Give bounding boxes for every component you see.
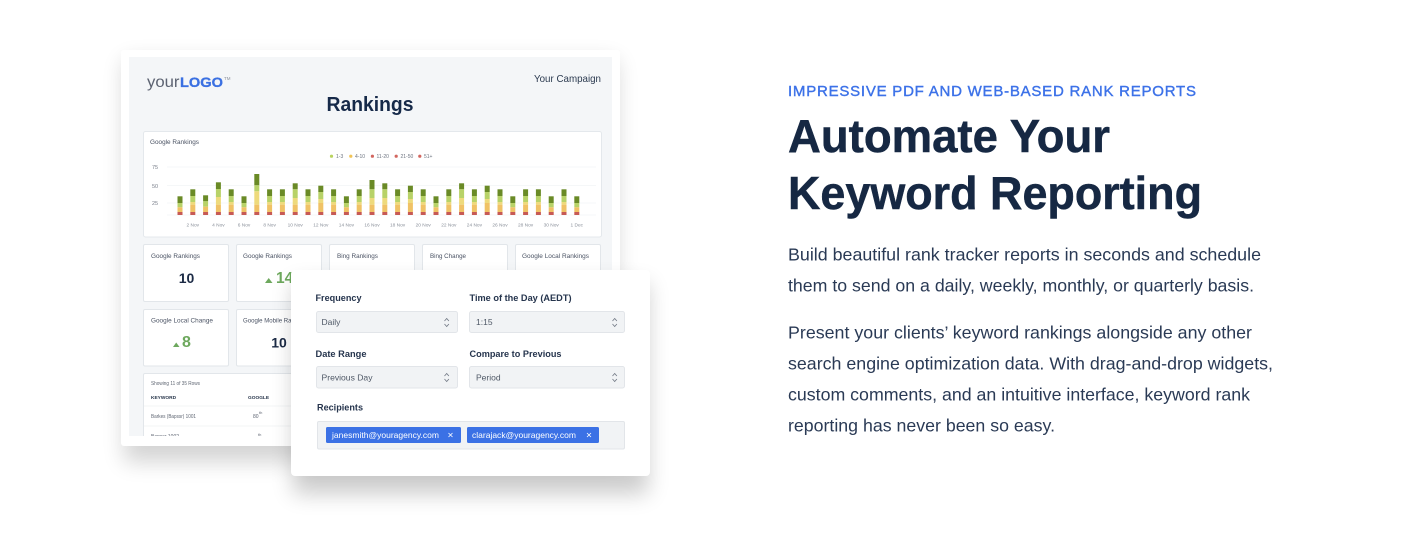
chart x axis: 2 Nov (187, 222, 200, 228)
chart x axis: 4 Nov (212, 222, 225, 228)
chart x axis: 30 Nov (544, 222, 559, 228)
heading: Keyword Reporting (788, 167, 1202, 219)
metric card: bing rankings (330, 244, 414, 302)
metric card: google local rankings: Google Local Rankings (522, 254, 589, 260)
chart x axis: 28 Nov (518, 222, 534, 228)
bar chart: google rankings (144, 132, 602, 237)
metric card: google local change: Google Local Change (151, 318, 214, 324)
metric card: google rankings: 10 (179, 270, 194, 286)
chart x axis: 24 Nov (467, 222, 483, 228)
heading (788, 110, 1202, 219)
metric card: google rankings change: 14 (276, 270, 294, 287)
field: date range (316, 349, 458, 388)
chart y axis (152, 165, 158, 207)
logo (147, 74, 231, 91)
field: time of the day (470, 293, 624, 332)
field: time of the day: 1:15 (476, 317, 493, 327)
chart x axis: 12 Nov (313, 222, 329, 228)
heading: Automate Your (788, 110, 1110, 162)
metric card: google rankings change: Google Rankings (243, 254, 292, 260)
field: frequency: Daily (322, 317, 341, 327)
metric card: bing change (422, 244, 508, 302)
recipient chip: janesmith (326, 427, 461, 443)
campaign label: Your Campaign (534, 73, 601, 85)
chart x axis: 14 Nov (339, 222, 355, 228)
field: recipients: Recipients (317, 402, 363, 412)
chart x axis: 22 Nov (441, 222, 457, 228)
rankings table: Barkes (Bapssr) 1001 (151, 414, 196, 420)
rankings table (143, 373, 291, 436)
paragraph: features: custom comments, and an intuitive interface, keyword rank (788, 385, 1250, 405)
chart x axis: 26 Nov (492, 222, 508, 228)
rankings table: th (258, 432, 261, 437)
chart title: Google Rankings (150, 139, 199, 146)
chart bars (178, 174, 579, 215)
chart x axis: 18 Nov (390, 222, 406, 228)
metric card: google rankings: Google Rankings (151, 254, 200, 260)
metric card: google mobile rankings: Google Mobile Rankings (243, 318, 309, 324)
metric card: google mobile rankings: 10 (271, 334, 287, 350)
rankings table: Showing 11 of 35 Rows (151, 381, 200, 387)
metric card: bing rankings: Bing Rankings (337, 254, 378, 260)
chart x axis (187, 222, 584, 228)
paragraph: features: search engine optimization data. With drag-and-drop widgets, (788, 354, 1273, 374)
report mockup (121, 50, 620, 462)
metric card: google mobile rankings (236, 310, 322, 366)
metric card: bing change: Bing Change (430, 254, 467, 260)
metric card: google local rankings (516, 244, 600, 302)
chart legend: 11-20 (376, 154, 389, 160)
report title: Rankings (326, 93, 414, 116)
field: compare to previous: Compare to Previous (470, 349, 562, 359)
rankings table: KEYWORD (151, 395, 177, 401)
chart y axis: 75 (152, 165, 158, 171)
rankings table: GOOGLE (248, 395, 270, 401)
recipient chip: clarajack: clarajack@youragency.com (472, 430, 576, 440)
field: frequency (316, 293, 458, 332)
field: date range: Previous Day (322, 372, 373, 382)
rankings table: Bapssr 1002 (151, 434, 179, 440)
metric card: google rankings (144, 244, 228, 302)
paragraph: features: reporting has never been so easy. (788, 416, 1055, 436)
logo: your (147, 74, 180, 91)
rankings table: th (259, 410, 262, 415)
chart x axis: 6 Nov (238, 222, 251, 228)
field: time of the day: Time of the Day (AEDT) (470, 293, 572, 303)
paragraph: scheduling: Build beautiful rank tracker reports in seconds and schedule (788, 245, 1261, 265)
chart legend (330, 154, 433, 160)
chart x axis: 20 Nov (416, 222, 431, 228)
logo: TM (224, 76, 231, 81)
field: date range: Date Range (316, 349, 366, 359)
eyebrow: IMPRESSIVE PDF AND WEB-BASED RANK REPORTS (788, 83, 1196, 100)
chart legend: 4-10 (355, 154, 365, 160)
field: recipients (317, 402, 624, 449)
chart y axis: 50 (152, 184, 158, 190)
recipient chip: clarajack (467, 427, 599, 443)
paragraph: features (788, 323, 1273, 436)
schedule settings panel (291, 270, 650, 494)
field: compare to previous: Period (476, 372, 501, 382)
chart y axis: 25 (152, 201, 158, 207)
metric card: google local change (144, 310, 228, 366)
chart x axis: 8 Nov (263, 222, 276, 228)
logo: LOGO (180, 74, 223, 90)
field: compare to previous (470, 349, 624, 388)
chart legend: 51+ (424, 154, 433, 160)
chart x axis: 1 Dec (571, 222, 584, 228)
paragraph: scheduling (788, 245, 1261, 296)
paragraph: scheduling: them to send on a daily, weekly, monthly, or quarterly basis. (788, 276, 1254, 296)
metric card: google local change: 8 (182, 334, 191, 351)
field: frequency: Frequency (316, 293, 362, 303)
recipient chip: janesmith: janesmith@youragency.com (331, 430, 439, 440)
chart legend: 21-50 (400, 154, 414, 160)
rankings table: 80 (253, 414, 259, 420)
metric card: google rankings change (236, 244, 322, 302)
chart x axis: 10 Nov (288, 222, 303, 228)
chart legend: 1-3 (336, 154, 343, 160)
paragraph: features: Present your clients’ keyword rankings alongside any other (788, 323, 1252, 343)
chart x axis: 16 Nov (364, 222, 380, 228)
